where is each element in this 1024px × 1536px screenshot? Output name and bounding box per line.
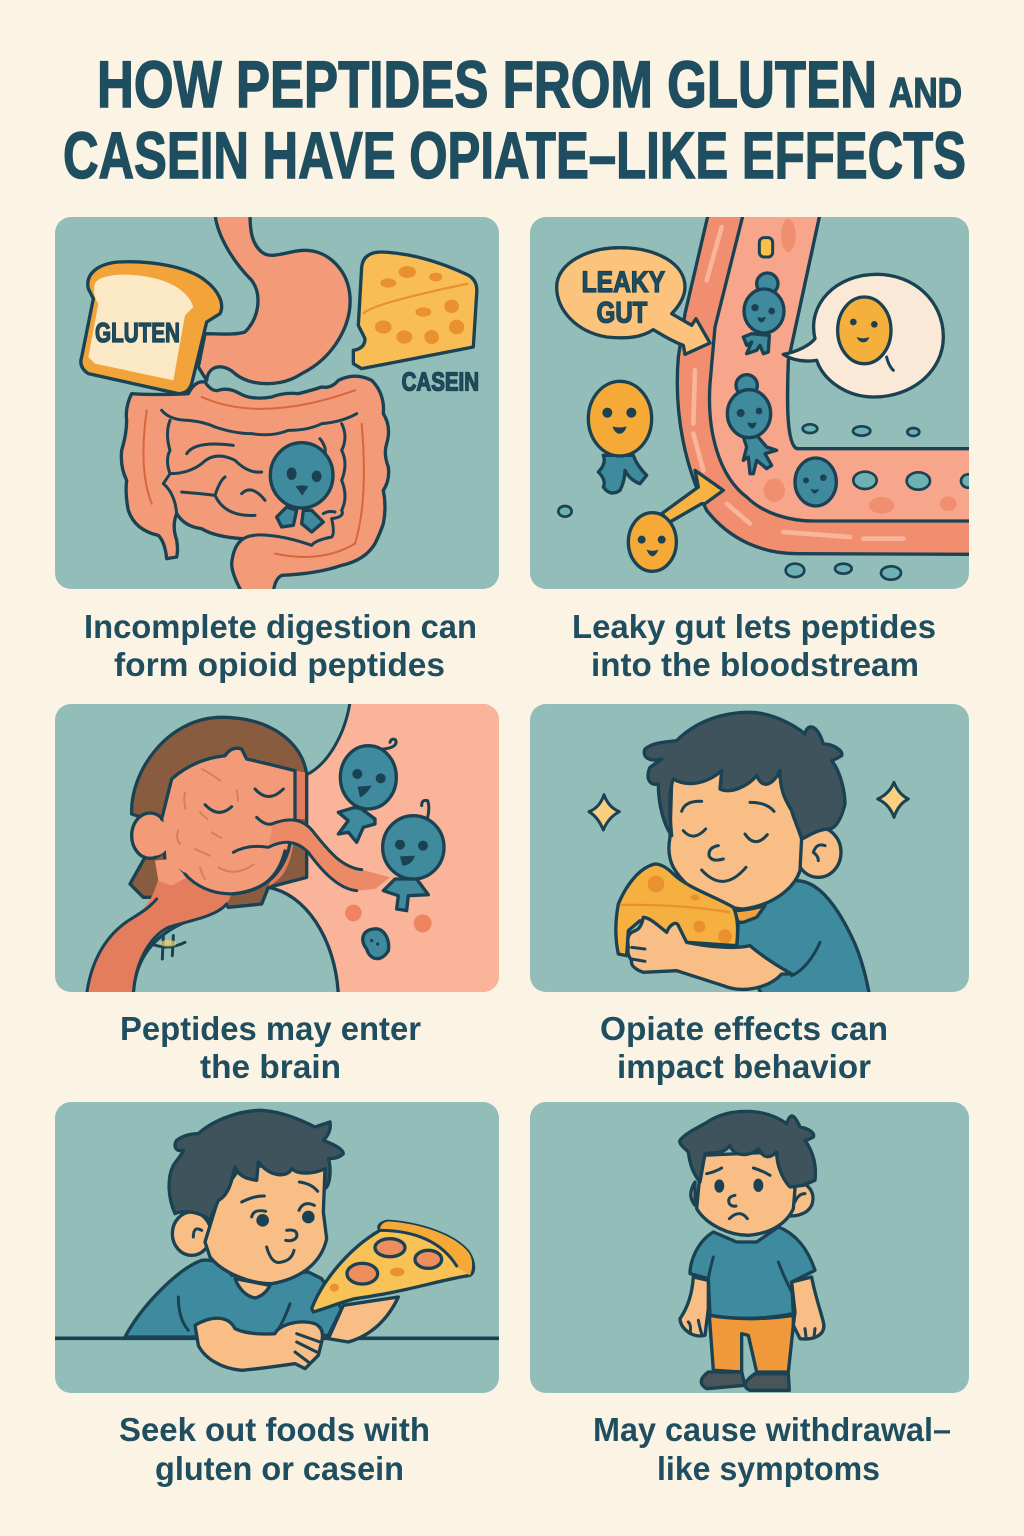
caption: panel 1: Incomplete digestion can: [84, 608, 477, 645]
icon: pizza: [312, 1221, 474, 1312]
icon: left arm: [195, 1318, 322, 1370]
caption: panel 6: like symptoms: [657, 1450, 880, 1487]
caption: panel 2: into the bloodstream: [591, 646, 919, 683]
icon: nose tube: [233, 817, 390, 891]
callout: thought bubble: [783, 274, 943, 397]
icon: peptides in gut: [558, 238, 976, 580]
caption: panel 4: Opiate effects can: [600, 1010, 888, 1047]
icon: table line: [55, 1336, 499, 1340]
icon: gut tube: [677, 214, 973, 554]
icon: ear: [802, 830, 843, 879]
icon: right forearm: [328, 1297, 398, 1342]
icon: head: [130, 717, 307, 907]
icon: orange peptide with arrow: [628, 470, 723, 571]
callout: leaky gut: LEAKY: [582, 266, 665, 299]
icon: pants: [709, 1315, 793, 1372]
panel: withdrawal: [530, 1102, 969, 1393]
icon: ear: [172, 1212, 211, 1255]
caption: panel 5: Seek out foods with: [119, 1411, 430, 1448]
pink zone: [275, 702, 502, 994]
icon: expression: [707, 1168, 805, 1219]
text: gluten: GLUTEN: [95, 317, 180, 348]
icon: cheese: [616, 864, 738, 956]
icon: arms: [680, 1277, 824, 1339]
icon: cheese: [353, 252, 477, 369]
icon: ears: [691, 1182, 813, 1216]
panel: brain: [55, 702, 502, 994]
icon: bread labelled gluten: [81, 262, 222, 394]
callout: leaky gut: [557, 248, 710, 354]
caption: panel 4: impact behavior: [617, 1048, 871, 1085]
caption: panel 3: Peptides may enter: [120, 1010, 421, 1047]
panel: behaviour: [530, 704, 969, 997]
icon: orange peptide large: [588, 381, 652, 493]
icon: sparkles: [589, 782, 908, 830]
caption: panel 2: Leaky gut lets peptides: [572, 608, 936, 645]
caption: panel 4: [600, 1010, 888, 1085]
icon: stomach: [198, 214, 350, 384]
icon: face: [697, 1152, 795, 1235]
caption: panel 3: [120, 1010, 421, 1085]
icon: shirt: [125, 1260, 342, 1337]
caption: panel 1: form opioid peptides: [114, 646, 445, 683]
icon: arm and hand: [628, 917, 820, 989]
caption: panel 2: [572, 608, 936, 683]
caption: panel 6: May cause withdrawal–: [593, 1411, 951, 1448]
icon: shirt: [690, 1227, 815, 1318]
icon: intestines: [121, 376, 389, 592]
caption: panel 6: [593, 1411, 951, 1487]
icon: child head: [169, 1110, 343, 1284]
icon: hair: [680, 1111, 815, 1187]
text: casein: CASEIN: [402, 366, 479, 396]
icon: shoes: [701, 1372, 789, 1390]
caption: panel 5: [119, 1411, 430, 1487]
icon: gut pathway: [87, 851, 285, 994]
icon: peptide: [270, 443, 333, 532]
panel: leaky gut: [530, 214, 976, 589]
panel: incomplete digestion: [55, 214, 499, 592]
title: [63, 47, 966, 192]
icon: sad child: [680, 1111, 824, 1390]
caption: panel 5: gluten or casein: [155, 1450, 404, 1487]
icon: floating peptides: [338, 739, 444, 959]
panel: seek foods: [53, 1102, 502, 1393]
icon: body: [133, 887, 338, 994]
icon: child head: [644, 712, 845, 909]
caption: panel 1: [84, 608, 477, 683]
title: AND: [889, 69, 962, 116]
icon: shirt: [737, 881, 870, 997]
callout: leaky gut: GUT: [597, 296, 647, 329]
caption: panel 3: the brain: [200, 1048, 341, 1085]
